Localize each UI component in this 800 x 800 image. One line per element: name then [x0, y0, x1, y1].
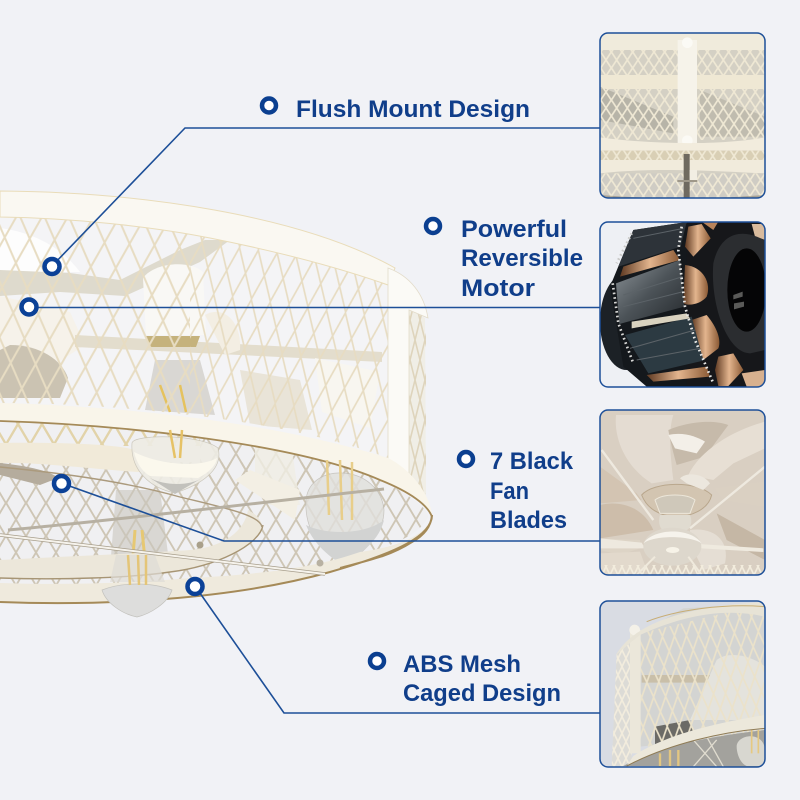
hub — [642, 484, 712, 517]
bulb 1 — [132, 430, 219, 494]
rods — [602, 450, 765, 528]
middle band — [0, 403, 432, 515]
bullet: flush mount — [262, 98, 276, 112]
leader line: mesh cage — [195, 586, 600, 713]
interior see-through glow — [0, 217, 388, 458]
heading: Powerful Reversible Motor: Powerful — [461, 216, 567, 243]
post — [630, 630, 641, 753]
motor body — [600, 280, 628, 370]
lower section — [623, 730, 765, 767]
leader line: fan blades — [61, 483, 600, 541]
marker: mesh cage on fixture — [188, 579, 202, 594]
heading: Powerful Reversible Motor: Reversible — [461, 245, 583, 272]
bullet: motor — [426, 219, 440, 233]
side mesh — [612, 642, 632, 767]
bulb 2 — [306, 460, 384, 566]
fan blades and motor behind upper mesh — [0, 210, 395, 465]
cage wall — [640, 603, 765, 747]
fan fixture photo — [0, 191, 432, 617]
copper coils — [685, 224, 711, 257]
panel: flush mount photo — [600, 33, 765, 200]
heading: Powerful Reversible Motor: Motor — [461, 275, 535, 302]
bottom band — [627, 715, 765, 766]
marker: motor on fixture — [22, 300, 36, 314]
marker: fan blades on fixture — [54, 476, 69, 491]
rotor ring — [713, 234, 765, 353]
lower cage interior — [0, 420, 428, 586]
heading: 7 Black Fan Blades: Blades — [490, 507, 567, 534]
panel: fan blades photo — [600, 410, 765, 576]
heading: 7 Black Fan Blades: 7 Black — [490, 448, 574, 475]
top band — [616, 602, 765, 655]
heading: Flush Mount Design: Flush Mount Design — [296, 96, 530, 123]
leader line: flush mount — [52, 128, 600, 266]
marker: flush mount on fixture — [44, 259, 60, 274]
dark upper mesh edge — [0, 216, 384, 283]
heading: 7 Black Fan Blades: Fan — [490, 478, 529, 505]
heading: Powerful Reversible Motor — [461, 216, 583, 302]
heading: ABS Mesh Caged Design: ABS Mesh — [403, 651, 521, 678]
heading: ABS Mesh Caged Design: Caged Design — [403, 680, 561, 707]
heading: 7 Black Fan Blades — [490, 448, 574, 534]
bullet: fan blades — [459, 452, 473, 466]
panel: motor photo — [600, 222, 766, 387]
leader line: motor — [29, 306, 600, 308]
support rods — [8, 489, 384, 530]
heading: ABS Mesh Caged Design — [403, 651, 561, 707]
right post — [388, 268, 428, 490]
inner blade hoop — [0, 467, 263, 579]
wood blade under band — [0, 443, 140, 472]
blades — [616, 415, 673, 483]
bulb 3 — [102, 555, 172, 617]
panel: mesh cage photo — [600, 601, 765, 767]
outer bottom ring — [0, 515, 432, 603]
top band — [0, 191, 395, 285]
right side mesh — [408, 308, 426, 495]
bullet: mesh cage — [370, 654, 384, 668]
stator segments — [618, 222, 687, 267]
bottom plate — [600, 538, 645, 548]
